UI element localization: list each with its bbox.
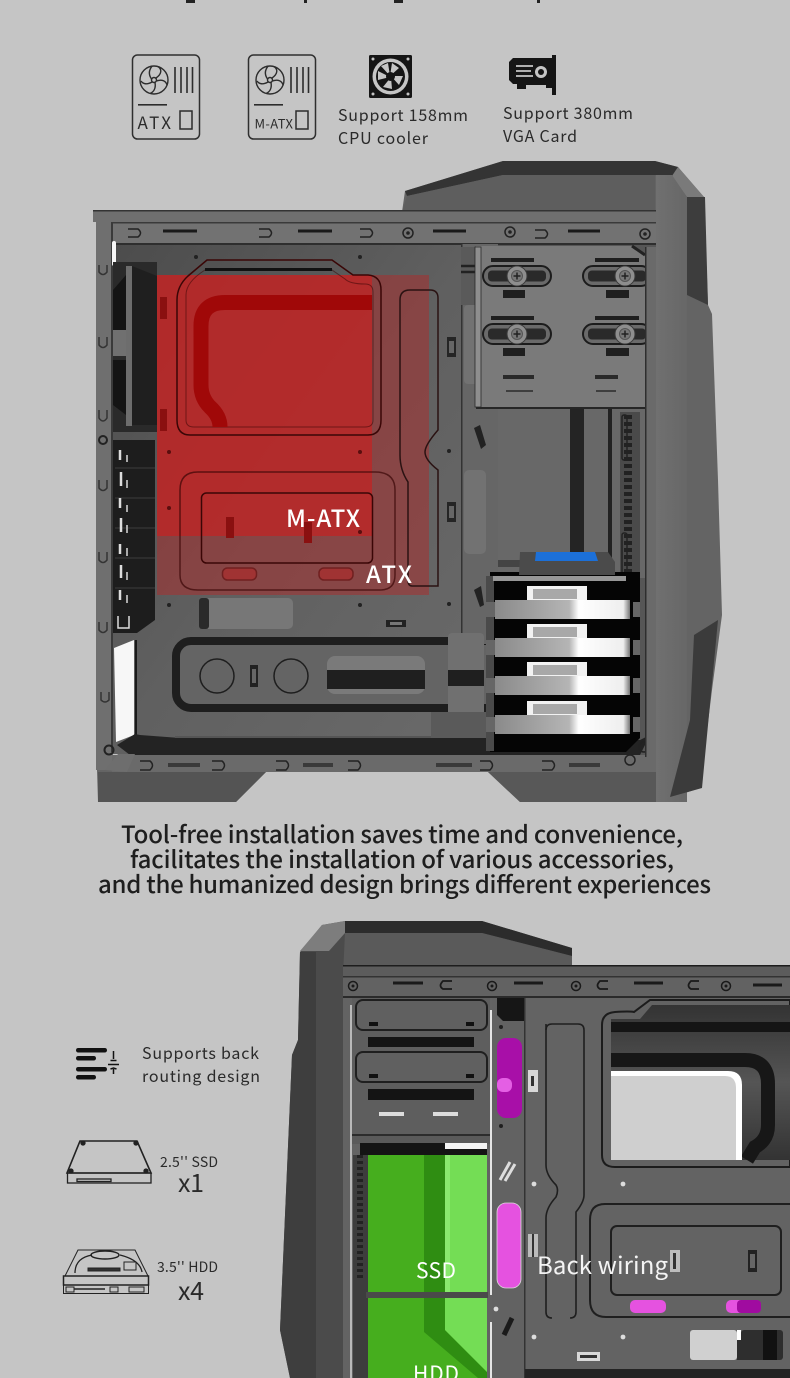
caption: back routing: Supports back (142, 1040, 259, 1064)
base edge (525, 1369, 790, 1378)
icon: SSD (67, 1141, 151, 1183)
caption: CPU cooler: Support 158mm (338, 102, 468, 126)
headline: Tool-free installation saves time and convenience, (121, 815, 683, 850)
interior backfill (483, 244, 656, 759)
HDD count (157, 1257, 218, 1308)
drive labels (413, 1255, 459, 1378)
centre column (431, 244, 498, 738)
HDD count: x4 (178, 1272, 204, 1308)
rear compartment (498, 408, 645, 578)
tray (113, 244, 483, 754)
white gaps (112, 241, 134, 742)
size labels: M-ATX (286, 499, 360, 534)
floor (105, 734, 656, 772)
rear cutout (690, 1330, 783, 1360)
left frame (96, 222, 127, 770)
back wiring label: Back wiring (537, 1246, 668, 1281)
centre column (492, 998, 538, 1378)
case interior view (93, 161, 722, 802)
upper drive cage (351, 998, 491, 1378)
icon: back routing (76, 1048, 119, 1080)
front bezel (280, 921, 790, 1378)
headline: facilitates the installation of various accessories, (130, 840, 674, 875)
tray embossing (160, 260, 438, 590)
side window (602, 1000, 790, 1167)
icon: CPU fan (369, 55, 412, 98)
hard-disk cage (486, 572, 640, 752)
clipped text line at top edge (186, 0, 540, 3)
icon: graphics card (509, 55, 556, 95)
expansion slots (113, 440, 155, 745)
caption: back routing: routing design (142, 1063, 260, 1087)
tray embossing (546, 1024, 790, 1318)
icon: ATX motherboard: ATX (138, 109, 171, 134)
icon: M-ATX motherboard (248, 55, 316, 139)
headline: and the humanized design brings different experiences (98, 865, 711, 900)
rear fan (113, 262, 157, 432)
size labels (286, 499, 412, 590)
icon: ATX motherboard (132, 55, 200, 139)
case rear view (280, 921, 790, 1378)
rear tray (343, 997, 790, 1378)
caption: VGA card: VGA Card (503, 123, 577, 147)
green HDD area (368, 1298, 487, 1378)
cage interior (353, 1155, 488, 1378)
lower tray details (167, 255, 406, 629)
upper drive cage (475, 246, 656, 770)
SSD (519, 552, 615, 575)
top rail (93, 210, 656, 245)
SSD count: x1 (178, 1164, 204, 1200)
PSU shroud (176, 641, 506, 708)
SSD count (160, 1152, 218, 1200)
size labels: ATX (366, 555, 412, 590)
icon: HDD (64, 1250, 148, 1294)
SSD count: 2.5'' SSD (160, 1152, 218, 1172)
icon: M-ATX motherboard: M-ATX (254, 114, 294, 132)
drive labels: SSD (416, 1255, 456, 1285)
drive clips (577, 1182, 757, 1361)
top rail (343, 965, 790, 998)
caption: VGA card: Support 380mm (503, 100, 633, 124)
green SSD area (368, 1155, 487, 1292)
caption: CPU cooler: CPU cooler (338, 125, 429, 149)
HDD count: 3.5'' HDD (157, 1257, 218, 1277)
front bezel (97, 161, 722, 802)
magenta cable cutouts (497, 1038, 761, 1313)
M-ATX and ATX red overlay (157, 275, 429, 595)
